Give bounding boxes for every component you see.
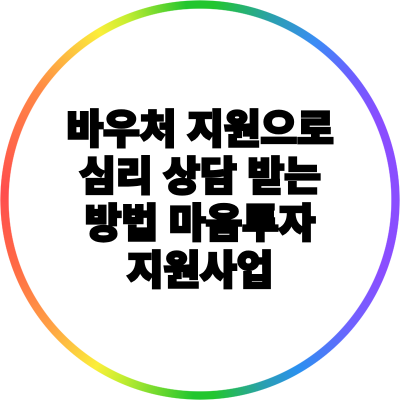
- title: 바우처 지원으로: [66, 108, 334, 152]
- title: 심리 상담 받는: [79, 154, 321, 198]
- title: 지원사업: [127, 248, 273, 292]
- title: [66, 108, 334, 292]
- title: 방법 마음투자: [85, 202, 315, 246]
